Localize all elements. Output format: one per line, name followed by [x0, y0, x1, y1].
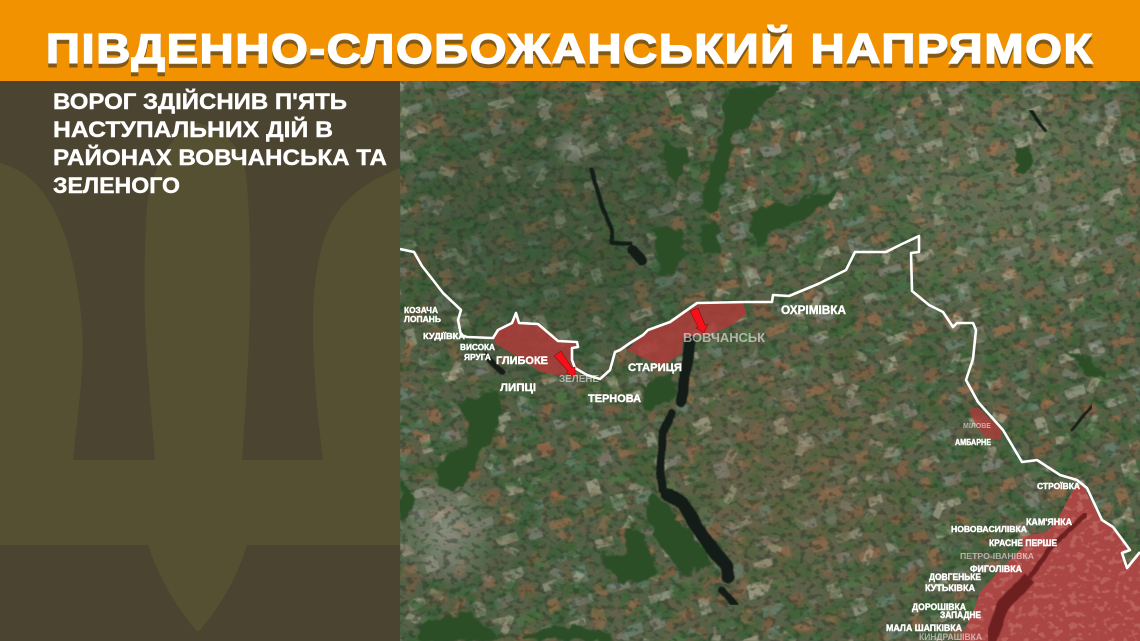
text block: summary	[53, 89, 387, 198]
occupied zone: Milove	[968, 407, 1003, 440]
settlement labels: ЗЕЛЕНЕ	[559, 374, 599, 385]
settlement labels: ПЕТРО-ІВАНІВКА	[960, 551, 1034, 561]
settlement labels: СТРОЇВКА	[1037, 481, 1080, 491]
cities	[392, 128, 592, 590]
settlement labels: ТЕРНОВА	[588, 393, 641, 405]
settlement labels: ЗАПАДНЕ	[940, 610, 981, 620]
settlement labels: ЛОПАНЬ	[404, 314, 441, 324]
text block: summary: НАСТУПАЛЬНИХ ДІЙ В	[53, 117, 333, 142]
settlement labels: ДОРОШІВКА	[912, 602, 966, 612]
occupied zone: Hlyboke	[493, 313, 578, 376]
panel: left background	[0, 81, 400, 641]
settlement labels: КРАСНЕ ПЕРШЕ	[989, 538, 1057, 548]
settlement labels: ОХРІМІВКА	[781, 303, 846, 317]
settlement labels: ВИСОКА	[460, 342, 495, 352]
settlement labels: КУДІЇВКА	[423, 331, 465, 341]
text block: summary: ВОРОГ ЗДІЙСНИВ П'ЯТЬ	[53, 89, 347, 114]
settlement labels: СТАРИЦЯ	[628, 362, 682, 374]
forests	[400, 84, 1105, 641]
occupied zone: south-east	[960, 484, 1140, 641]
settlement labels: ВОВЧАНСЬК	[683, 331, 765, 345]
occupied zone: Vovchansk	[627, 303, 747, 363]
settlement labels: ФИГОЛІВКА	[970, 564, 1022, 574]
icon: trident watermark	[0, 123, 400, 632]
settlement labels	[404, 303, 1080, 641]
regional tone	[390, 80, 1140, 620]
arrow: attack on Vovchansk	[690, 308, 708, 333]
settlement labels: ЯРУГА	[464, 352, 491, 362]
settlement labels: МІЛОВЕ	[963, 421, 991, 430]
text block: summary: ЗЕЛЕНОГО	[53, 173, 180, 198]
text block: summary: РАЙОНАХ ВОВЧАНСЬКА ТА	[53, 145, 387, 170]
panel: satellite map	[390, 80, 1140, 641]
settlement labels: ЛИПЦІ	[500, 382, 536, 394]
frontline border	[400, 236, 1140, 568]
settlement labels: КАМ'ЯНКА	[1026, 517, 1072, 527]
settlement labels: ГЛИБОКЕ	[496, 355, 548, 367]
rivers and reservoir	[485, 110, 1092, 605]
settlement labels: КОЗАЧА	[404, 305, 438, 315]
settlement labels: НОВОВАСИЛІВКА	[951, 524, 1027, 534]
settlement labels: МАЛА ШАПКІВКА	[886, 623, 962, 633]
header band	[0, 0, 1140, 81]
arrow: attack on Zelene	[554, 351, 575, 377]
settlement labels: ДОВГЕНЬКЕ	[929, 572, 981, 582]
settlement labels: КУТЬКІВКА	[925, 583, 975, 593]
title: ПІВДЕННО-СЛОБОЖАНСЬКИЙ НАПРЯМОК	[46, 24, 1094, 72]
settlement labels: АМБАРНЕ	[955, 438, 992, 447]
